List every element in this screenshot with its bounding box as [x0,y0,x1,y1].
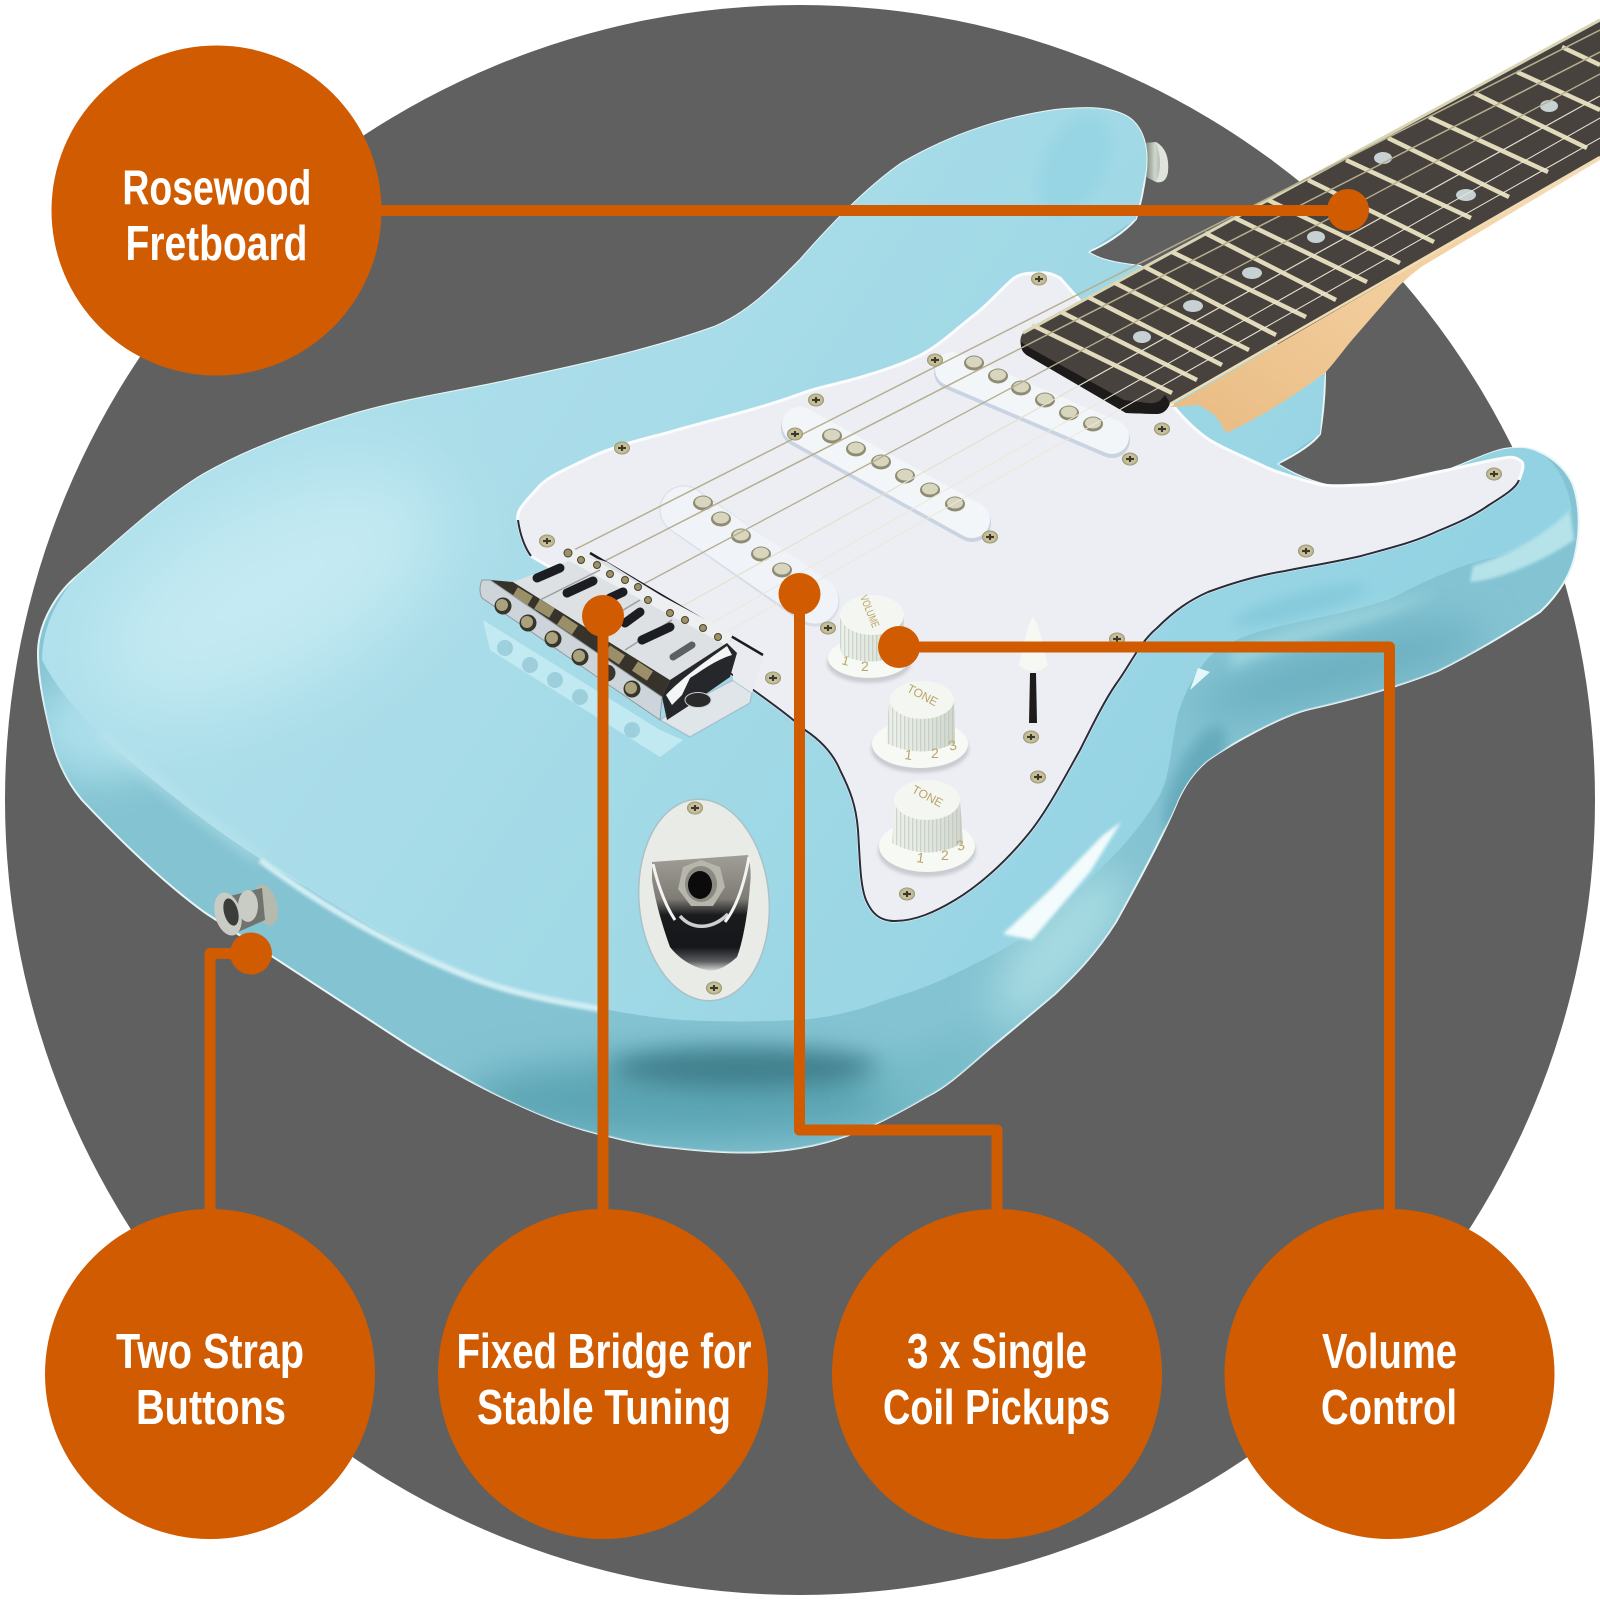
knob: tone: 1 [916,849,926,866]
callout: Two Strap Buttons [45,1209,375,1539]
callout: Rosewood Fretboard: Fretboard [126,217,308,271]
knob: volume: 1 [840,652,851,669]
pickguard [518,273,1523,921]
inlay dots [1133,100,1558,343]
knob: tone: 3 [947,736,959,754]
selector switch [1019,617,1048,723]
pickguard screws [539,272,1502,900]
frets [1032,47,1600,393]
knob: tone: 2 [941,847,949,863]
callout: Volume Control: Control [1321,1381,1457,1435]
knob: tone: 3 [955,836,967,854]
knob: tone: TONE [910,782,945,810]
callout: Fixed Bridge for Stable Tuning: Stable Tuning [477,1381,731,1435]
callout: Fixed Bridge for Stable Tuning [438,1209,768,1539]
neck [1020,20,1600,433]
jack cup [652,855,751,970]
maple neck side and heel [1170,157,1600,433]
saddles [513,555,733,680]
callout: 3 x Single Coil Pickups: 3 x Single [907,1325,1087,1379]
callout: 3 x Single Coil Pickups [832,1209,1162,1539]
front rail [480,580,662,720]
jack plate [630,794,778,1006]
line: pickups [800,594,997,1215]
line: fretboard [375,205,1348,216]
rosewood fretboard [1020,20,1600,414]
callout: Fixed Bridge for Stable Tuning: Fixed Bridge for [456,1325,752,1379]
callout: Volume Control: Volume [1322,1325,1457,1379]
fretboard edge [1023,20,1600,333]
neck pickup [952,356,1112,440]
strap button [210,882,282,939]
strings [568,30,1600,637]
bridge pickup [684,496,815,602]
callout: Two Strap Buttons: Buttons [136,1381,286,1435]
guitar body [30,102,1579,1153]
guitar illustration [30,20,1600,1153]
bridge [480,549,763,757]
callout: Volume Control [1224,1209,1554,1539]
connector lines [210,210,1390,1215]
jack socket [678,860,725,906]
pickups [684,356,1112,602]
callout: Two Strap Buttons: Two Strap [116,1325,304,1379]
bridge reflection [483,620,683,757]
rear strap button [1144,142,1168,182]
callout: Rosewood Fretboard [52,46,382,376]
knob: tone: 2 [931,745,939,761]
knob: tone: TONE [905,681,940,709]
knob: volume: 2 [861,658,869,674]
knob: tone: 1 [904,746,914,763]
callout: 3 x Single Coil Pickups: Coil Pickups [883,1381,1110,1435]
line: strap buttons [210,954,251,1215]
end block [662,643,737,720]
middle pickup [800,425,972,523]
knob: volume: VOLUME [857,594,881,630]
knob: tone [878,780,976,877]
springs [490,580,670,697]
line: bridge [598,616,608,1215]
callout: Rosewood Fretboard: Rosewood [122,162,311,216]
line: volume [899,647,1390,1215]
knob: tone [871,681,969,773]
knob: volume [827,594,911,683]
cut line in pickguard [590,553,763,655]
base plate [660,680,752,737]
saddle screws [564,549,722,640]
anchor dots [230,189,1369,974]
rail screws [494,598,640,698]
